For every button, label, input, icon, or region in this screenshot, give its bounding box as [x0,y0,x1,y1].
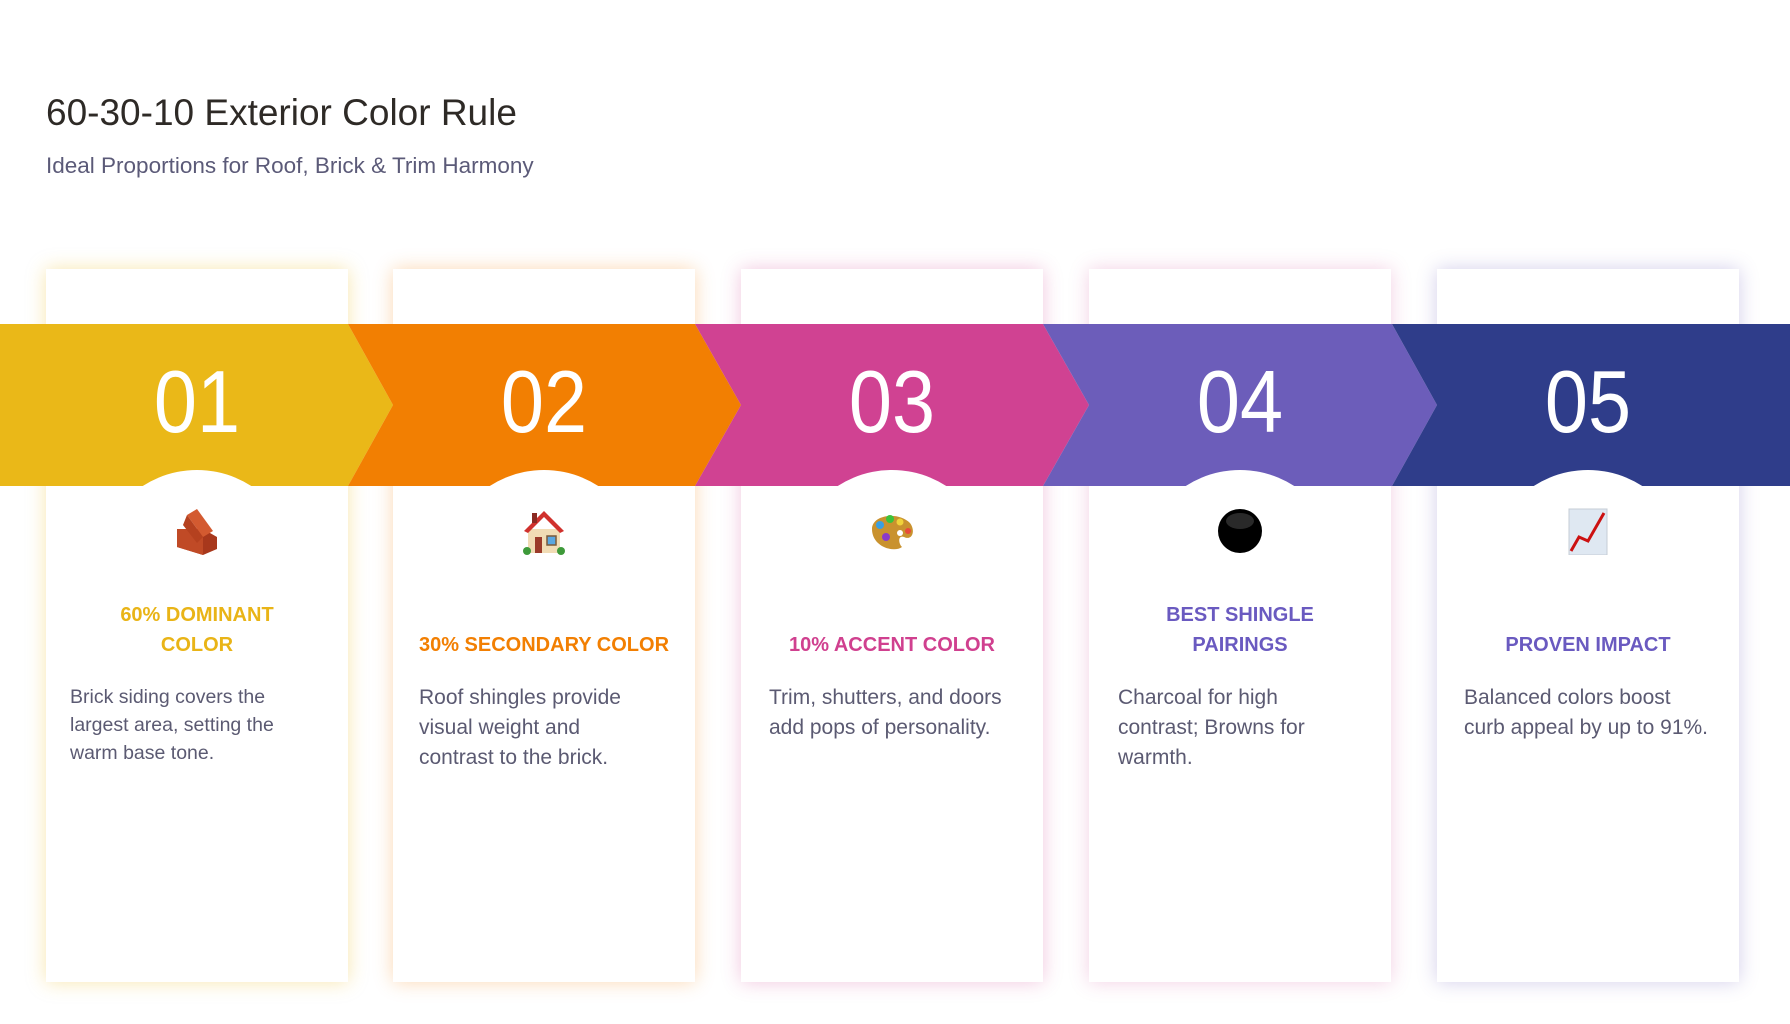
heading 4: PAIRINGS [1192,634,1288,656]
body 4: Charcoal for high [1118,686,1278,709]
body 2: visual weight and [419,716,580,739]
body 3: Trim, shutters, and doors [769,686,1002,709]
heading 5: PROVEN IMPACT [1505,634,1671,656]
body 3 [769,686,1002,739]
body 1: warm base tone. [70,742,214,764]
number 05: 05 [1545,352,1631,451]
icon: palette [872,515,913,550]
body 2: contrast to the brick. [419,746,608,769]
icon: chart [1568,508,1608,555]
body 2 [419,686,621,769]
chevron 4 [1043,324,1437,486]
white bumps [142,470,1642,486]
body 2: Roof shingles provide [419,686,621,709]
body 1: Brick siding covers the [70,686,265,708]
icon: house [523,511,565,555]
number 03: 03 [849,352,935,451]
number 04: 04 [1197,352,1283,451]
card 4 [1089,269,1391,982]
card 1 [46,269,348,982]
card 5 [1437,269,1739,982]
heading 4 [1166,604,1314,656]
card 2 [393,269,695,982]
heading 3: 10% ACCENT COLOR [789,634,995,656]
title: 60-30-10 Exterior Color Rule [46,92,517,133]
body 4 [1118,686,1305,769]
card 3 [741,269,1043,982]
icon: brick [177,509,217,555]
chevron 2 [348,324,741,486]
chevron 5 [1392,324,1790,486]
number 01: 01 [154,352,240,451]
chevron band [0,324,1790,486]
body 1 [70,686,274,764]
icon: black circle [1218,509,1262,553]
heading 1: COLOR [161,634,233,656]
heading 4: BEST SHINGLE [1166,604,1314,626]
heading 1 [120,604,274,656]
body 4: contrast; Browns for [1118,716,1305,739]
chevron 3 [695,324,1089,486]
heading 2: 30% SECONDARY COLOR [419,634,669,656]
body 5 [1464,686,1708,739]
body 1: largest area, setting the [70,714,274,736]
body 4: warmth. [1118,746,1193,769]
body 5: Balanced colors boost [1464,686,1671,709]
body 3: add pops of personality. [769,716,990,739]
number 02: 02 [501,352,587,451]
body 5: curb appeal by up to 91%. [1464,716,1708,739]
heading 1: 60% DOMINANT [120,604,274,626]
subtitle: Ideal Proportions for Roof, Brick & Trim Harmony [46,153,534,178]
chevron 1 [0,324,393,486]
